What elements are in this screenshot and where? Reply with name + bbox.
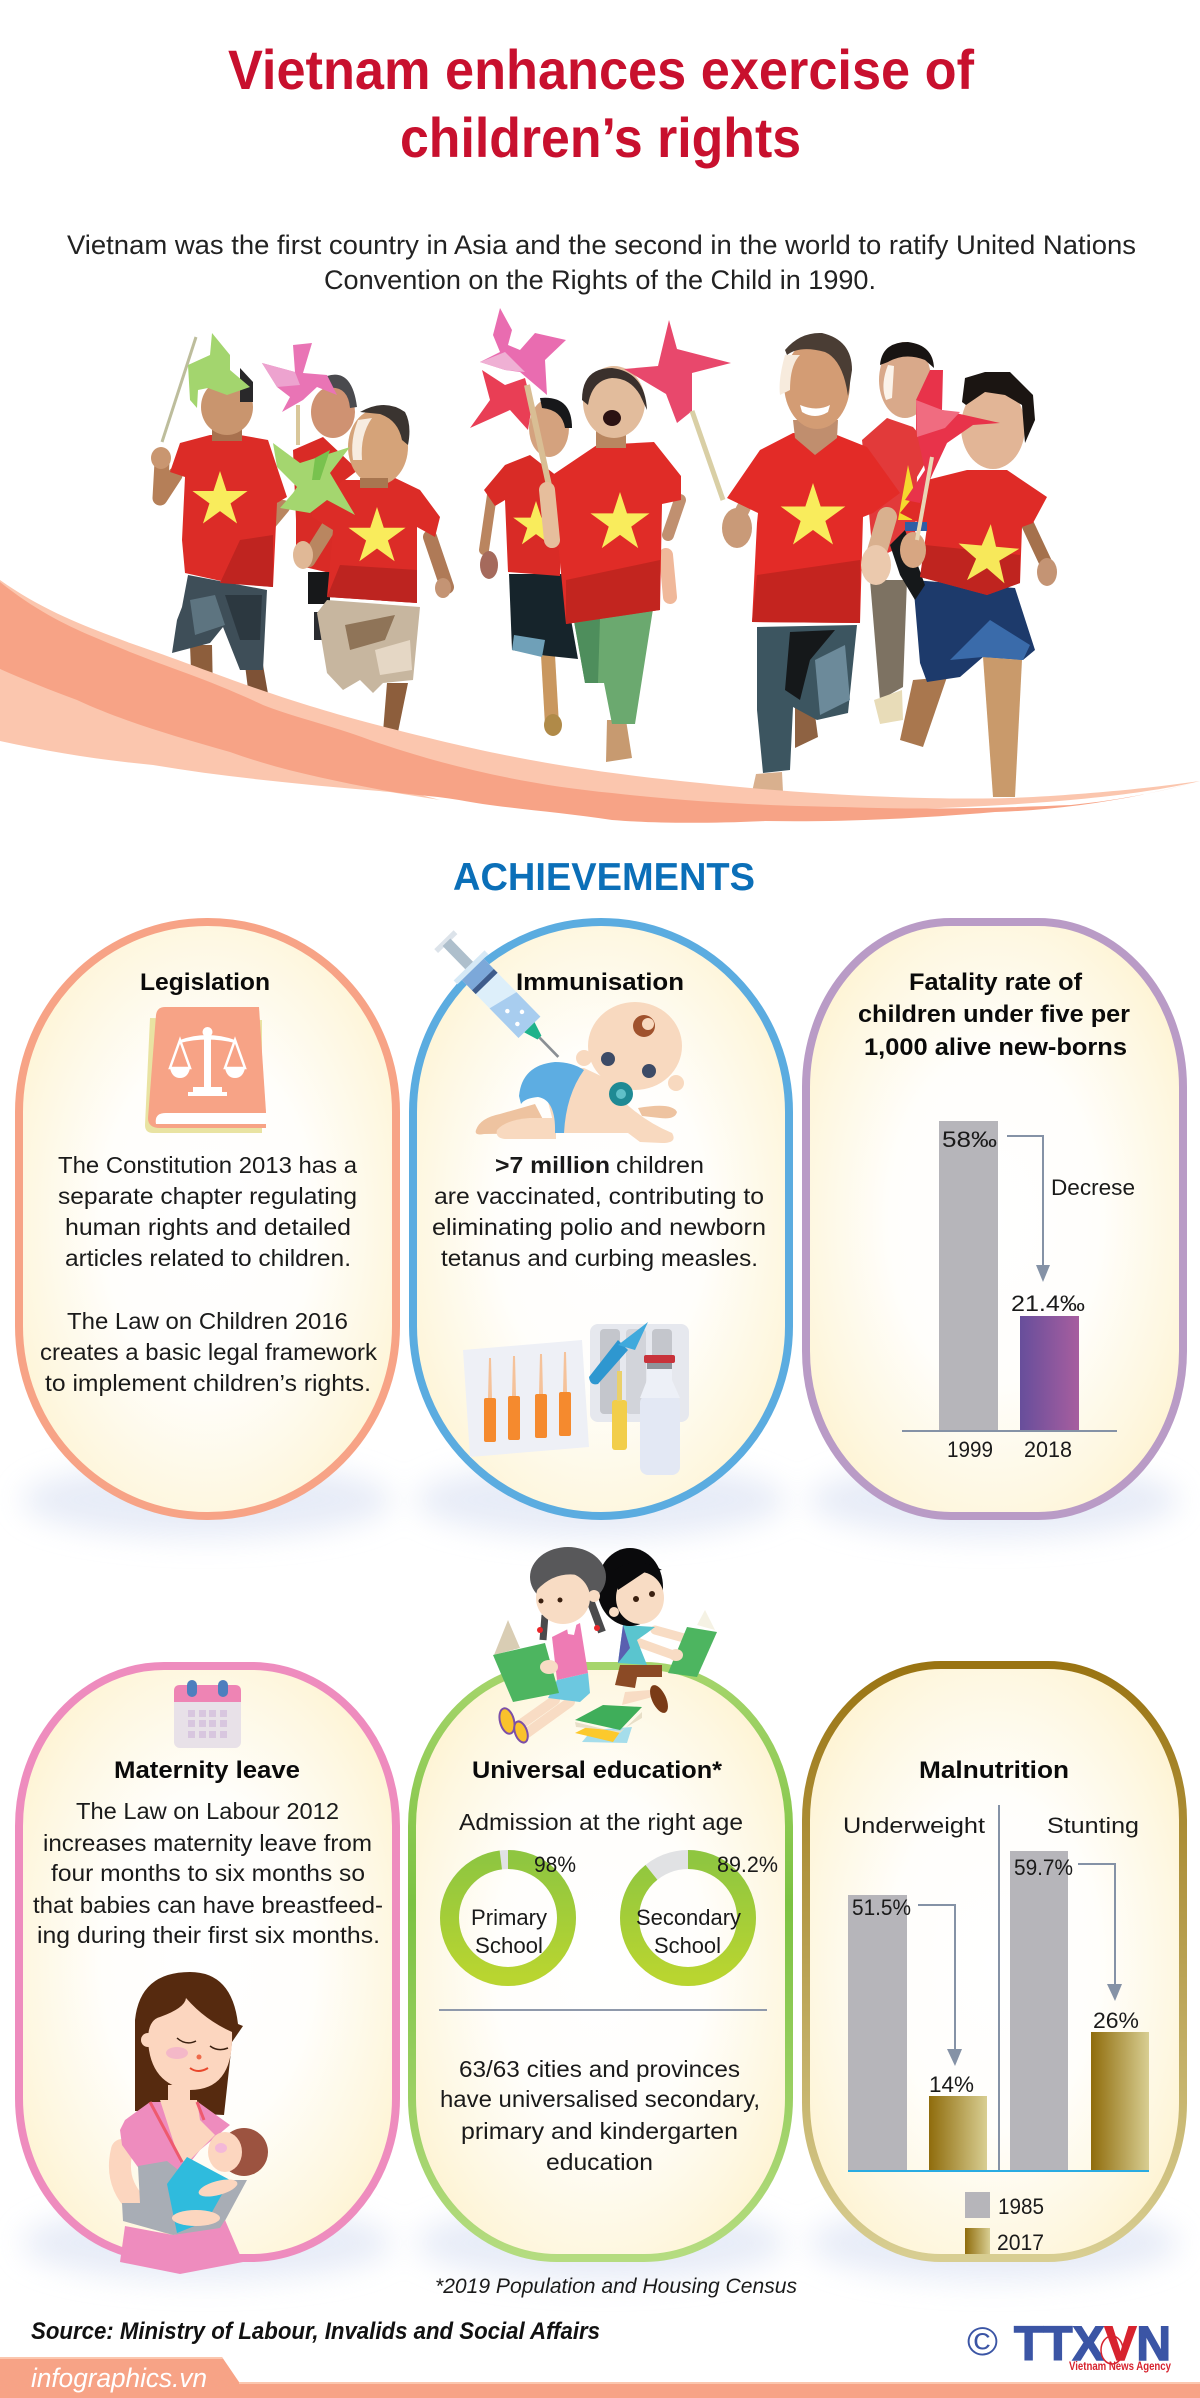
panel: legislation <box>19 922 396 1516</box>
intro text: Convention on the Rights of the Child in 1990. <box>324 265 876 295</box>
section heading: achievements: ACHIEVEMENTS <box>453 856 755 899</box>
heading: fatality rate: 1,000 alive new-borns <box>864 1034 1127 1061</box>
donut chart: secondary school 89.2%: School <box>654 1933 721 1958</box>
text block: vaccination: tetanus and curbing measles. <box>441 1245 758 1271</box>
child 8 with blue shorts and red pinwheel <box>890 370 1057 797</box>
heading: maternity leave: Maternity leave <box>114 1757 300 1784</box>
bar chart: stunting <box>1010 1813 1149 2171</box>
hero illustration: children running with pinwheels <box>151 308 1057 797</box>
footnote: *2019 Population and Housing Census <box>435 2275 797 2298</box>
bar chart: underweight: Underweight <box>843 1813 985 1838</box>
swoosh ribbon <box>0 580 1200 823</box>
logo: TTXVN Vietnam News Agency: TTXVN <box>1014 2318 1171 2371</box>
logo: TTXVN Vietnam News Agency: Vietnam News Agency <box>1069 2359 1171 2373</box>
donut chart: secondary school 89.2% <box>630 1852 778 1976</box>
icon: law book with scales <box>145 1007 266 1133</box>
heading: malnutrition: Malnutrition <box>919 1757 1069 1784</box>
heading: universal education: Universal education* <box>472 1757 723 1784</box>
heading: immunisation: Immunisation <box>516 969 684 996</box>
text block: universalised education: education <box>546 2149 653 2175</box>
logo: TTXVN Vietnam News Agency: © <box>967 2320 998 2364</box>
text block: universalised education: 63/63 cities and provinces <box>459 2056 740 2082</box>
text block: law on labour: ing during their first six months. <box>37 1922 380 1948</box>
arrow: decrease <box>1007 1136 1050 1282</box>
arrow: stunting decrease <box>1078 1864 1122 2001</box>
bar chart: stunting: Stunting <box>1047 1813 1139 1838</box>
text block: law on children 2016: creates a basic legal framework <box>40 1339 378 1365</box>
panel shadows <box>22 1462 1179 2281</box>
arrow: underweight decrease <box>918 1905 962 2066</box>
text block: vaccination: eliminating polio and newborn <box>432 1214 766 1240</box>
source line: Source: Ministry of Labour, Invalids and Social Affairs <box>31 2318 600 2345</box>
donut chart: primary school 98% <box>450 1852 576 1976</box>
bar chart: underweight <box>843 1813 987 2171</box>
title: Vietnam enhances exercise of <box>228 38 974 101</box>
text block: vaccination: >7 million <box>495 1152 610 1178</box>
icon: syringe <box>428 925 574 1072</box>
donut chart: primary school 98%: 98% <box>534 1852 576 1877</box>
title <box>228 38 974 169</box>
bar chart: underweight: 14% <box>929 2072 974 2097</box>
donut chart: secondary school 89.2%: 89.2% <box>717 1852 778 1877</box>
text block: constitution 2013: human rights and detailed <box>65 1214 351 1240</box>
intro text <box>67 230 1136 295</box>
child 5 laughing with green trousers <box>547 320 731 762</box>
donut chart: primary school 98%: Primary <box>471 1905 547 1930</box>
illustration: two children reading <box>493 1547 717 1744</box>
child behind right <box>862 342 934 724</box>
text block: law on labour: that babies can have breastfeed- <box>33 1892 383 1918</box>
child 3 with beige shorts <box>273 405 451 732</box>
icon: calendar <box>174 1680 241 1748</box>
bar chart: underweight: 51.5% <box>852 1895 911 1920</box>
text block: law on labour: increases maternity leave from <box>43 1830 372 1856</box>
heading: legislation: Legislation <box>140 969 270 996</box>
bar chart: fatality rate 1999 vs 2018: 58‰ <box>942 1127 997 1152</box>
panel: malnutrition <box>806 1665 1183 2258</box>
child 4 with pink and red pinwheels <box>470 308 578 736</box>
bar chart: stunting: 59.7% <box>1014 1855 1073 1880</box>
subheading: admission at the right age: Admission at the right age <box>459 1809 743 1835</box>
title: children’s rights <box>400 106 801 169</box>
text block: law on labour <box>33 1798 383 1948</box>
child 6 with jeans <box>722 333 900 792</box>
icon: crawling baby <box>476 1002 684 1143</box>
bar chart: fatality rate 1999 vs 2018: Decrese <box>1051 1175 1135 1200</box>
text block: constitution 2013: separate chapter regulating <box>58 1183 357 1209</box>
text block: vaccination: are vaccinated, contributing to <box>434 1183 764 1209</box>
heading: fatality rate <box>858 969 1130 1061</box>
panel: under-five fatality rate <box>806 922 1183 1516</box>
text block: law on children 2016: The Law on Children 2016 <box>67 1308 348 1334</box>
text block: law on children 2016 <box>40 1308 378 1396</box>
legend <box>965 2192 1044 2255</box>
text block: universalised education: have universalised secondary, <box>440 2086 760 2112</box>
donut chart: primary school 98%: School <box>475 1933 543 1958</box>
text block: universalised education: primary and kindergarten <box>461 2118 738 2144</box>
text block: vaccination: children <box>616 1152 704 1178</box>
site name: infographics.vn <box>31 2363 207 2393</box>
child behind left with pink pinwheel <box>262 343 358 640</box>
legend: 2017 <box>997 2230 1044 2255</box>
donut chart: secondary school 89.2%: Secondary <box>636 1905 741 1930</box>
panel: maternity leave <box>19 1666 396 2274</box>
bar chart: fatality rate 1999 vs 2018: 2018 <box>1024 1437 1072 1462</box>
panel: immunisation <box>413 922 789 1516</box>
child 1 with green pinwheel <box>151 333 287 705</box>
illustration: mother breastfeeding baby <box>120 1972 268 2274</box>
bar chart: fatality rate 1999 vs 2018 <box>902 1121 1135 1462</box>
footer bar with site name <box>0 2357 1200 2398</box>
bar chart: fatality rate 1999 vs 2018: 1999 <box>947 1437 993 1462</box>
text block: constitution 2013 <box>58 1152 357 1271</box>
bar chart: fatality rate 1999 vs 2018: 21.4‰ <box>1011 1291 1085 1316</box>
text block: constitution 2013: The Constitution 2013 has a <box>58 1152 357 1178</box>
text block: law on labour: The Law on Labour 2012 <box>76 1798 339 1824</box>
legend: 1985 <box>998 2194 1044 2219</box>
text block: universalised education <box>440 2056 760 2175</box>
text block: law on children 2016: to implement children’s rights. <box>45 1370 371 1396</box>
intro text: Vietnam was the first country in Asia and the second in the world to ratify United Nations <box>67 230 1136 260</box>
text block: law on labour: four months to six months so <box>51 1860 365 1886</box>
text block: vaccination <box>432 1152 766 1271</box>
icon: vaccine vials and ampoules <box>463 1322 689 1475</box>
heading: fatality rate: Fatality rate of <box>909 969 1083 996</box>
text block: constitution 2013: articles related to children. <box>65 1245 351 1271</box>
heading: fatality rate: children under five per <box>858 1001 1130 1028</box>
bar chart: stunting: 26% <box>1093 2008 1139 2033</box>
panel: universal education <box>412 1547 789 2258</box>
